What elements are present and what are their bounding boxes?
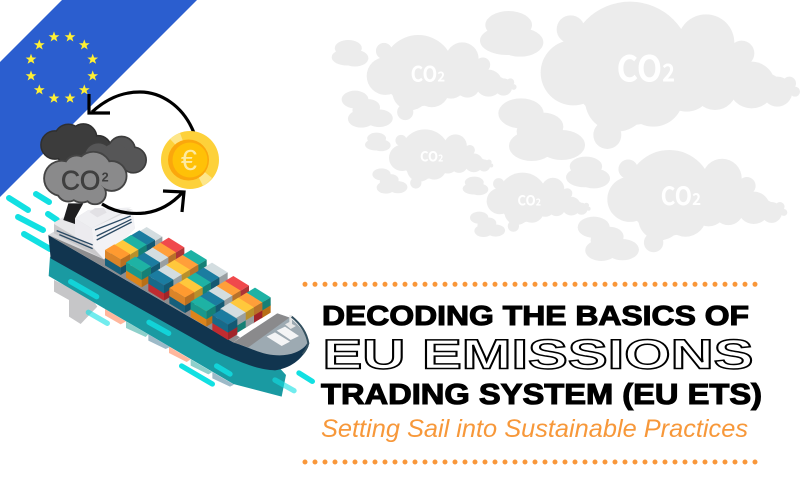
- small left CO2 cloud: CO2: [420, 146, 444, 167]
- arrow: CO2 cloud to euro coin: [102, 191, 184, 213]
- large CO2 cloud: [541, 2, 800, 149]
- container ship: [48, 203, 312, 397]
- lower-right CO2 cloud: CO2: [661, 177, 701, 213]
- small centre CO2 cloud: CO2: [517, 189, 541, 210]
- title: outlined line two: EU EMISSIONS: [322, 330, 754, 378]
- upper-left CO2 cloud: CO2: [411, 58, 445, 88]
- icon: euro coin: [161, 131, 219, 189]
- small left CO2 cloud: [389, 129, 493, 189]
- title: line three: TRADING SYSTEM (EU ETS): [321, 379, 762, 411]
- small puffs: [332, 11, 639, 261]
- small centre CO2 cloud: [487, 173, 591, 232]
- EU flag band: [0, 0, 197, 197]
- superstructure: [48, 203, 135, 259]
- large CO2 cloud: CO2: [617, 41, 675, 93]
- front CO2 cloud: 2: [102, 171, 109, 185]
- bottom dotted divider: [305, 460, 756, 464]
- arrow: euro coin to flag: [89, 92, 194, 133]
- front CO2 cloud: [44, 152, 126, 204]
- speed lines over ship: [71, 282, 312, 391]
- lower-right CO2 cloud: [607, 150, 787, 252]
- mid grey cloud: [84, 137, 146, 175]
- front CO2 cloud: CO: [61, 165, 100, 195]
- icon: CO2 smoke clouds: [41, 124, 146, 204]
- background clouds: [332, 2, 800, 261]
- top dotted divider: [305, 282, 756, 287]
- title: line one: DECODING THE BASICS OF: [322, 300, 749, 331]
- cargo containers: [105, 227, 271, 340]
- icon: euro coin: €: [181, 145, 197, 177]
- speed lines behind ship: [9, 194, 57, 249]
- icon: ring of twelve stars: [26, 31, 98, 103]
- subtitle: Setting Sail into Sustainable Practices: [321, 415, 748, 443]
- upper-left CO2 cloud: [367, 35, 517, 120]
- ship reflection: [49, 257, 286, 397]
- hull: [48, 227, 308, 370]
- dark back cloud: [41, 124, 111, 167]
